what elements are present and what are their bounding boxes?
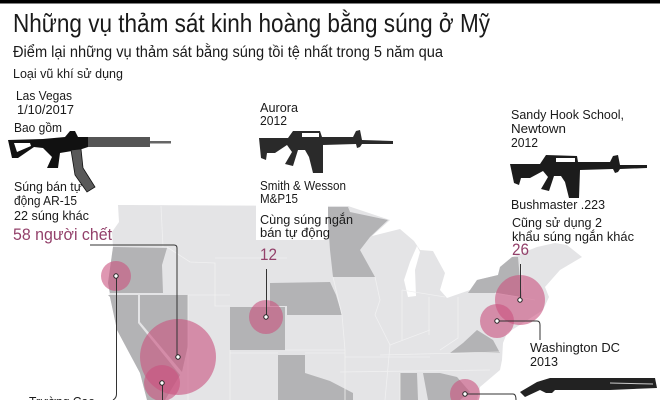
location circles: [101, 261, 545, 400]
subtitle: Điểm lại những vụ thảm sát bằng súng tồi tệ nhất trong 5 năm qua: [13, 44, 443, 61]
leader lines: [90, 245, 540, 400]
panel: Aurora: Smith & Wesson: [260, 178, 346, 193]
panel: Las Vegas: Súng bán tự: [14, 179, 82, 194]
white backing behind Aurora text: [256, 200, 328, 240]
panel: Sandy Hook: Cũng sử dụng 2: [512, 215, 602, 230]
icon: M&P15 rifle: [259, 130, 393, 173]
panel: Sandy Hook: khẩu súng ngắn khác: [512, 229, 634, 244]
location dots: [114, 274, 522, 396]
section label: Loại vũ khí sử dụng: [13, 66, 123, 81]
dark states: [108, 207, 522, 400]
panel: Las Vegas: [8, 88, 171, 244]
panel: Sandy Hook: Newtown: [511, 121, 566, 136]
panel: Aurora: 12: [260, 245, 277, 264]
panel: Aurora: Cùng súng ngắn: [260, 212, 353, 227]
panel: Las Vegas: Bao gồm: [14, 120, 62, 135]
lake michigan: [404, 246, 420, 297]
panel: Aurora: M&P15: [260, 191, 298, 206]
panel: Sandy Hook: Bushmaster .223: [511, 197, 605, 212]
panel: Aurora: 2012: [260, 113, 287, 128]
panel: Washington DC: Washington DC: [530, 340, 620, 355]
panel: Washington DC: 2013: [530, 354, 558, 369]
panel: Las Vegas: Las Vegas: [16, 88, 72, 103]
panel: Las Vegas: động AR-15: [14, 193, 77, 208]
map of the United States: [108, 205, 582, 400]
panel: Sandy Hook: [510, 107, 647, 259]
panel: Sandy Hook: Sandy Hook School,: [511, 107, 624, 122]
panel: Las Vegas: 1/10/2017: [17, 102, 74, 117]
panel: Las Vegas: 22 súng khác: [14, 208, 89, 223]
icon: shotgun: [520, 378, 657, 397]
panel: Sandy Hook: 2012: [511, 135, 538, 150]
panel: Sandy Hook: 26: [512, 240, 529, 259]
panel: Aurora: [259, 100, 393, 264]
panel: Aurora: Aurora: [260, 100, 299, 115]
top black bar: [0, 0, 660, 4]
title: Những vụ thảm sát kinh hoàng bằng súng ở Mỹ: [13, 8, 490, 38]
panel: Washington DC: [520, 340, 657, 397]
icon: Bushmaster rifle: [510, 155, 647, 198]
panel: Aurora: bán tự động: [260, 225, 330, 240]
icon: AR-15 rifle: [8, 131, 171, 192]
panel: Las Vegas: 58 người chết: [13, 225, 112, 244]
state borders: [161, 206, 535, 400]
